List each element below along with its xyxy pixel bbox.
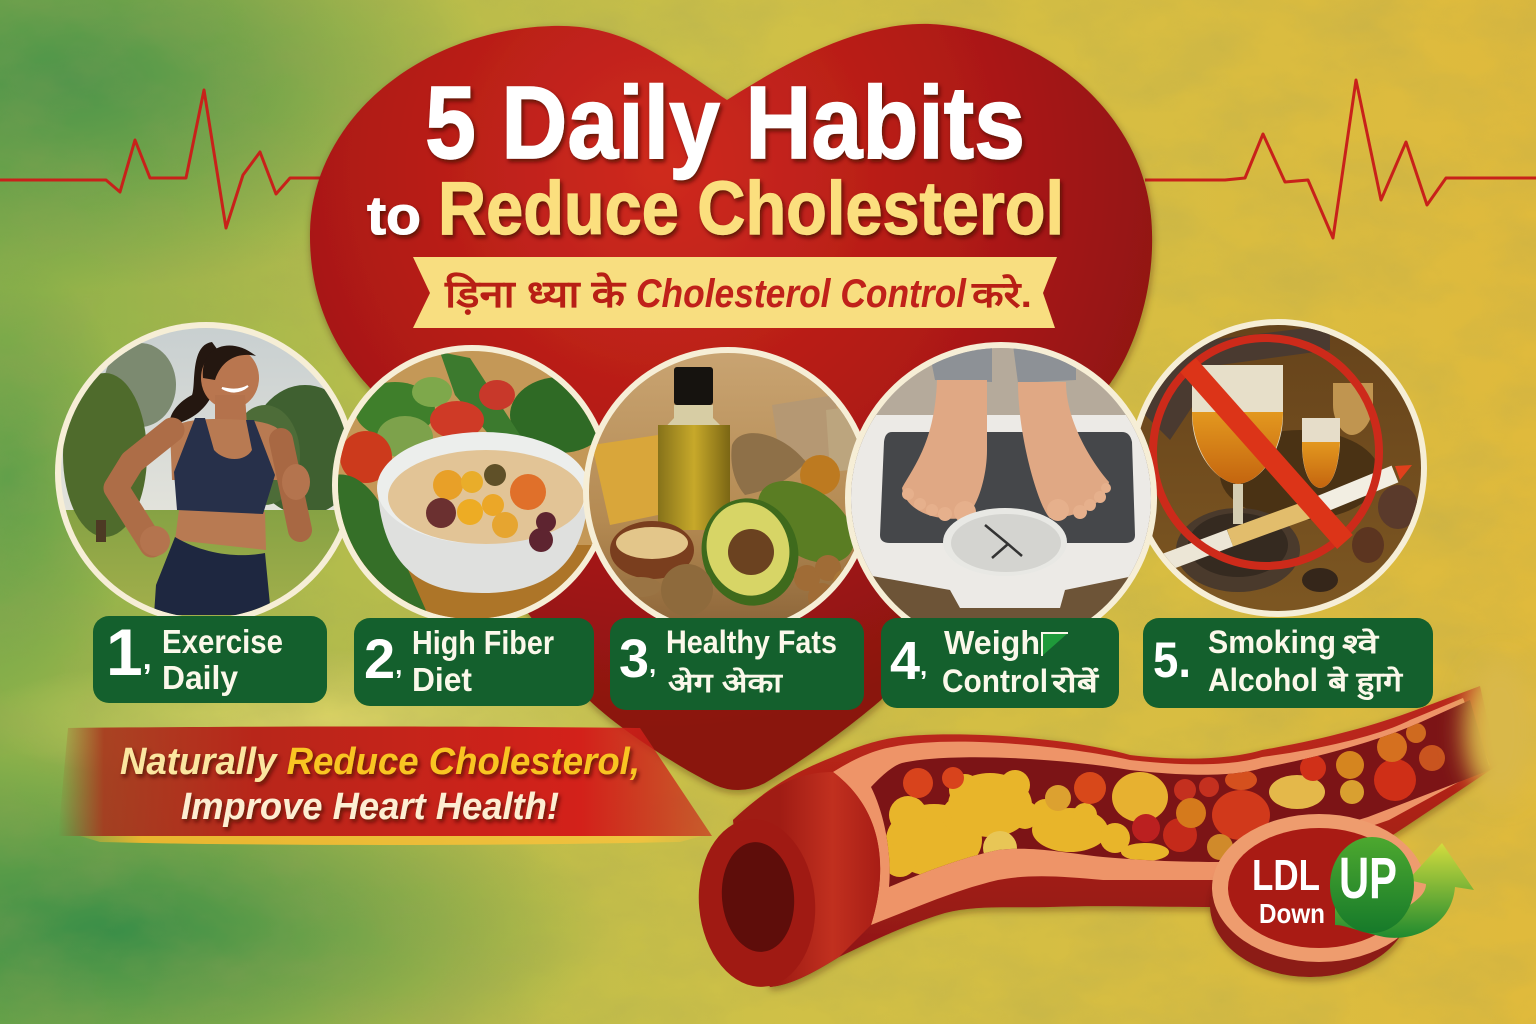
label 5: 5. [1153, 632, 1191, 688]
artery outer wall [733, 686, 1498, 987]
label 1 [93, 615, 327, 703]
label 2: Diet [412, 661, 472, 698]
UP bubble [1330, 837, 1414, 933]
label 4 [881, 618, 1119, 708]
LDL badge [1210, 814, 1474, 977]
photo 4: weight control [845, 342, 1157, 618]
label 3: अेग अेका [668, 667, 783, 698]
label 1: , [143, 640, 152, 676]
label 5 [1143, 618, 1433, 708]
prohibition sign [1153, 338, 1379, 566]
label 5: Alcohol [1208, 662, 1318, 698]
label 3: 3 [619, 629, 649, 689]
label 1: 1 [106, 615, 143, 689]
label 3 [610, 618, 864, 710]
Down text: Down [1259, 898, 1325, 929]
label 2: High Fiber [412, 624, 554, 661]
up arrow [1335, 843, 1474, 938]
label 4: 4 [890, 631, 920, 691]
heartbeat line: right [1145, 80, 1536, 238]
photo 2: high fiber diet [332, 345, 615, 630]
photo 1: woman exercising [55, 322, 365, 625]
label 3: , [649, 649, 656, 679]
title line 1: 5 Daily Habits [425, 65, 1025, 180]
label 2 [354, 618, 594, 706]
label 4: रोबें [1051, 667, 1100, 698]
cigarette [1166, 538, 1230, 562]
label 4: Control [942, 663, 1048, 699]
banner [58, 726, 712, 845]
label 5: Smoking [1208, 624, 1336, 660]
label 5: श्वे [1342, 628, 1379, 659]
title line 2: to: to [367, 186, 421, 246]
subtitle hindi right: करे. [971, 274, 1032, 315]
artery channel with plaque [871, 700, 1488, 887]
subtitle ribbon [413, 257, 1057, 328]
label 2: , [395, 650, 402, 680]
label 4: , [920, 651, 927, 681]
LDL text: LDL [1252, 851, 1320, 900]
heart [310, 24, 1152, 790]
title line 2: Reduce Cholesterol: Reduce Cholesterol [438, 166, 1064, 250]
banner line 2: Improve Heart Health! [181, 786, 559, 828]
artery opening [692, 814, 822, 992]
banner line 1: Naturally Reduce Cholesterol, [120, 741, 640, 783]
photo 3: healthy fats [583, 347, 860, 618]
UP text: UP [1339, 846, 1397, 911]
subtitle english: Cholesterol Control [636, 272, 967, 316]
plaque: yellow fat clusters [883, 770, 1169, 877]
label 1: Daily [162, 659, 239, 696]
artery front surface [733, 772, 880, 987]
artery [692, 660, 1536, 992]
label 4: Weigh [944, 624, 1040, 661]
woman [170, 342, 217, 422]
title [367, 65, 1064, 250]
artery wall cutaway [833, 698, 1490, 925]
label 3: Healthy Fats [666, 624, 837, 660]
label 1: Exercise [162, 623, 283, 660]
heartbeat line: left [0, 90, 320, 228]
artery right end fade [1464, 660, 1536, 800]
subtitle hindi left: ड़िना ध्या के [444, 272, 627, 316]
label 5: बे हुागे [1327, 666, 1404, 701]
label 2: 2 [364, 627, 395, 690]
photo 5: no smoking and alcohol [1129, 319, 1427, 617]
